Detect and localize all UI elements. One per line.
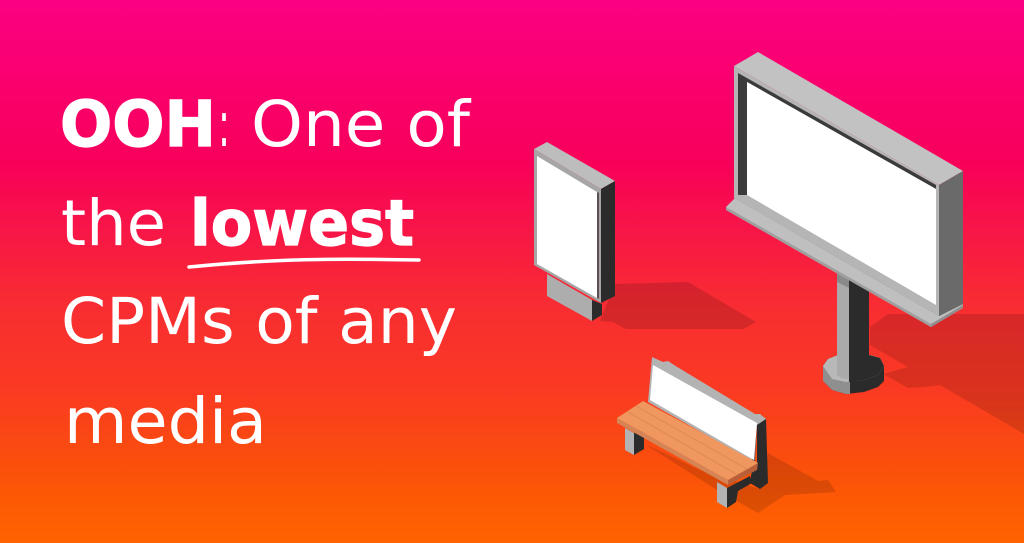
headline line 4: media <box>64 385 267 458</box>
headline line 1: OOH <box>60 88 216 161</box>
sign front frame <box>534 149 601 303</box>
large billboard <box>726 52 963 394</box>
sign base <box>547 274 592 321</box>
headline line 2 <box>61 187 414 260</box>
bench back frame <box>648 357 766 462</box>
shadow: bench <box>643 443 836 513</box>
sign right side <box>601 181 615 303</box>
sign top face <box>534 142 615 189</box>
billboard screen <box>747 82 936 305</box>
bench <box>617 357 768 508</box>
hand-drawn underline <box>189 259 419 267</box>
headline line 1 <box>60 88 472 161</box>
sign screen <box>537 156 597 298</box>
headline line 3: CPMs of any <box>61 285 457 358</box>
billboard shelf <box>726 198 963 327</box>
billboard top face <box>734 52 963 185</box>
bench seat <box>617 401 758 485</box>
headline line 2: the <box>61 187 166 260</box>
shadow: large billboard <box>870 314 1024 434</box>
billboard front frame <box>734 66 939 316</box>
bench left leg <box>625 428 644 455</box>
billboard inner shadow <box>738 73 936 195</box>
small vertical sign <box>534 142 615 321</box>
bench back screen <box>650 365 757 460</box>
headline line 1: One of <box>251 88 472 161</box>
headline <box>60 88 472 458</box>
shadow: small sign <box>600 282 756 329</box>
bench right leg <box>717 476 752 508</box>
headline line 2: lowest <box>190 187 414 260</box>
billboard right side <box>939 171 963 316</box>
billboard pole <box>823 273 884 394</box>
bench back support <box>750 419 768 489</box>
pole base <box>823 355 884 394</box>
headline line 1: : <box>218 88 230 161</box>
